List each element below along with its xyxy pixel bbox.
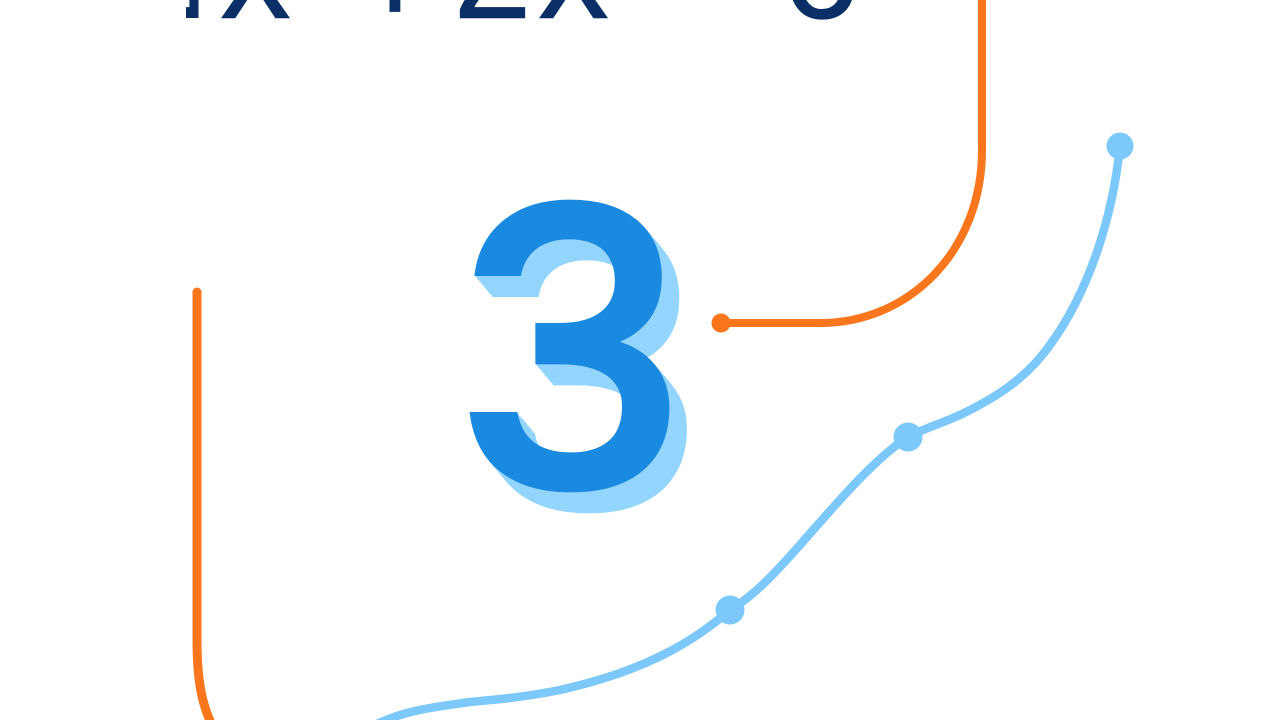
large numeral 3 with extruded shadow: 3: [464, 130, 686, 574]
large numeral 3 with extruded shadow: 3: [468, 134, 690, 578]
large numeral 3 with extruded shadow: 3: [462, 126, 683, 570]
large numeral 3 with extruded shadow: 3: [472, 138, 693, 582]
orange curve: lower left: [197, 292, 212, 720]
large numeral 3 with extruded shadow: 3: [467, 132, 688, 576]
large numeral 3 with extruded shadow: 3: [463, 128, 684, 572]
large numeral 3 with extruded shadow: 3: [474, 142, 696, 586]
orange curve: upper right: [721, 0, 982, 323]
large numeral 3 with extruded shadow: [470, 200, 687, 514]
large numeral 3 with extruded shadow: 3: [476, 143, 697, 587]
large numeral 3 with extruded shadow: 3: [470, 136, 691, 580]
large numeral 3 with extruded shadow: 3: [466, 131, 687, 575]
large numeral 3 with extruded shadow: 3: [478, 145, 699, 589]
orange end dot: [712, 314, 730, 332]
large numeral 3 with extruded shadow: 3: [471, 137, 692, 581]
blue curve with nodes: [375, 132, 1134, 720]
large numeral 3 with extruded shadow: 3: [474, 140, 695, 584]
equation text, cropped at top: [186, 0, 852, 20]
large numeral 3 with extruded shadow: 3: [460, 124, 681, 568]
